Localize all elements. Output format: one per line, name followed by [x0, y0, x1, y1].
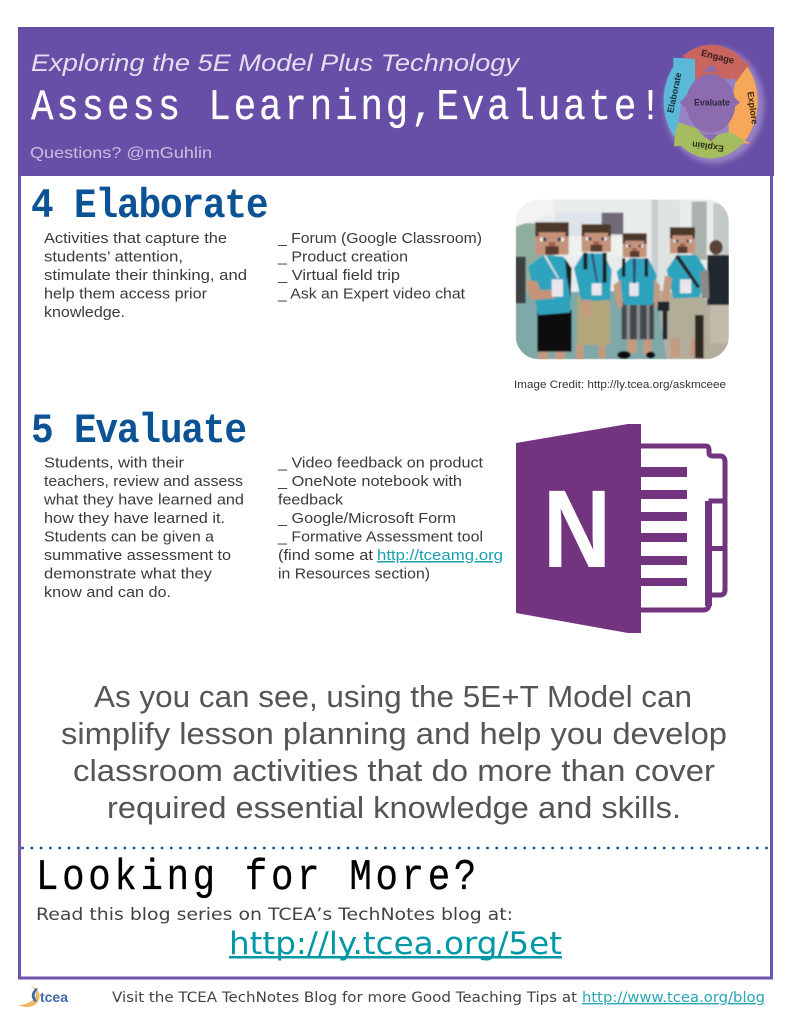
wheel segment: Engage [683, 45, 749, 90]
summary paragraph [61, 679, 727, 825]
text block: evaluate technology list [277, 454, 503, 582]
text block: evaluate technology list: _ OneNote notebook with [277, 473, 462, 490]
heading: Looking for More?: Looking for More? [36, 853, 476, 903]
logo: TCEA [18, 985, 68, 1007]
text block: elaborate description: stimulate their thinking, and [44, 267, 247, 284]
wheel label: Elaborate: Elaborate [665, 72, 684, 114]
text block: elaborate description [44, 230, 247, 321]
text block: evaluate description: how they have learned it. [44, 510, 225, 527]
icon: OneNote logo [516, 424, 725, 633]
wheel label: Explain: Explain [691, 139, 724, 154]
photo: four attendees wearing block heads [516, 199, 729, 360]
man in background [707, 255, 729, 305]
text block: evaluate description [43, 454, 244, 601]
questions contact line: Questions? @mGuhlin [30, 145, 212, 162]
icon letter N: N [543, 468, 611, 591]
summary paragraph: classroom activities that do more than cover [73, 753, 715, 788]
wheel centre: Evaluate: Evaluate [694, 97, 730, 107]
heading: 5 Evaluate: 5 Evaluate [31, 407, 247, 455]
wheel segment: Explore [728, 67, 758, 143]
text block: elaborate description: help them access prior [44, 286, 207, 302]
text block: elaborate technology list: _ Forum (Google Classroom) [277, 230, 482, 247]
text block: evaluate technology list: feedback [278, 492, 344, 508]
header title: Assess Learning,Evaluate! [31, 83, 662, 133]
text block: elaborate description: knowledge. [44, 304, 125, 321]
header banner [18, 27, 774, 176]
wheel label: Explore: Explore [745, 91, 760, 125]
text block: evaluate technology list: (find some at [278, 547, 374, 564]
text block: elaborate technology list: _ Virtual field trip [277, 267, 400, 284]
link: blog series URL: http://ly.tcea.org/5et [229, 926, 562, 962]
text block: elaborate technology list: _ Ask an Expert video chat [277, 286, 466, 302]
summary paragraph: As you can see, using the 5E+T Model can [94, 679, 692, 714]
heading: 4 Elaborate: 4 Elaborate [31, 182, 269, 230]
header subtitle: Exploring the 5E Model Plus Technology [31, 50, 521, 77]
text block: evaluate technology list: _ Google/Microsoft Form [277, 510, 456, 527]
summary paragraph: simplify lesson planning and help you develop [61, 716, 727, 751]
footer text: Visit the TCEA TechNotes Blog for more Good Teaching Tips at [112, 990, 578, 1006]
image credit caption: Image Credit: http://ly.tcea.org/askmceee [514, 379, 726, 391]
person 2 [576, 343, 583, 360]
text block: evaluate technology list: _ Video feedback on product [277, 454, 484, 472]
text block: elaborate description: students’ attention, [44, 248, 183, 266]
person 3 [627, 337, 637, 353]
wheel label: Engage: Engage [700, 48, 735, 66]
text block: evaluate description: Students can be given a [44, 528, 215, 546]
text block: evaluate description: summative assessment to [44, 547, 231, 564]
text block: elaborate technology list: _ Product creation [277, 248, 408, 266]
person 1 [538, 350, 548, 360]
text block: evaluate description: know and can do. [44, 584, 171, 601]
wheel segment: Explain [674, 122, 745, 158]
text block: evaluate description: what they have learned and [43, 492, 244, 508]
text block: elaborate description: Activities that capture the [44, 230, 227, 247]
logo: TCEA: tcea [40, 989, 68, 1005]
blog series line: Read this blog series on TCEA’s TechNotes blog at: [36, 905, 513, 925]
link: footer blog URL: http://www.tcea.org/blog [582, 990, 765, 1006]
text block: evaluate technology list: in Resources section) [278, 566, 430, 582]
text block: evaluate description: teachers, review and assess [44, 473, 243, 490]
icon: 5E cycle wheel [664, 45, 764, 163]
person 4 [671, 337, 680, 357]
text block: evaluate description: Students, with their [44, 454, 184, 472]
summary paragraph: required essential knowledge and skills. [107, 790, 681, 825]
dotted divider [22, 847, 770, 849]
text block: elaborate technology list [277, 230, 482, 302]
text block: evaluate description: demonstrate what they [44, 566, 213, 582]
text block: evaluate technology list: http://tceamg.org [377, 547, 503, 564]
text block: evaluate technology list: _ Formative Assessment tool [277, 528, 483, 546]
wheel segment: Elaborate [664, 58, 695, 137]
